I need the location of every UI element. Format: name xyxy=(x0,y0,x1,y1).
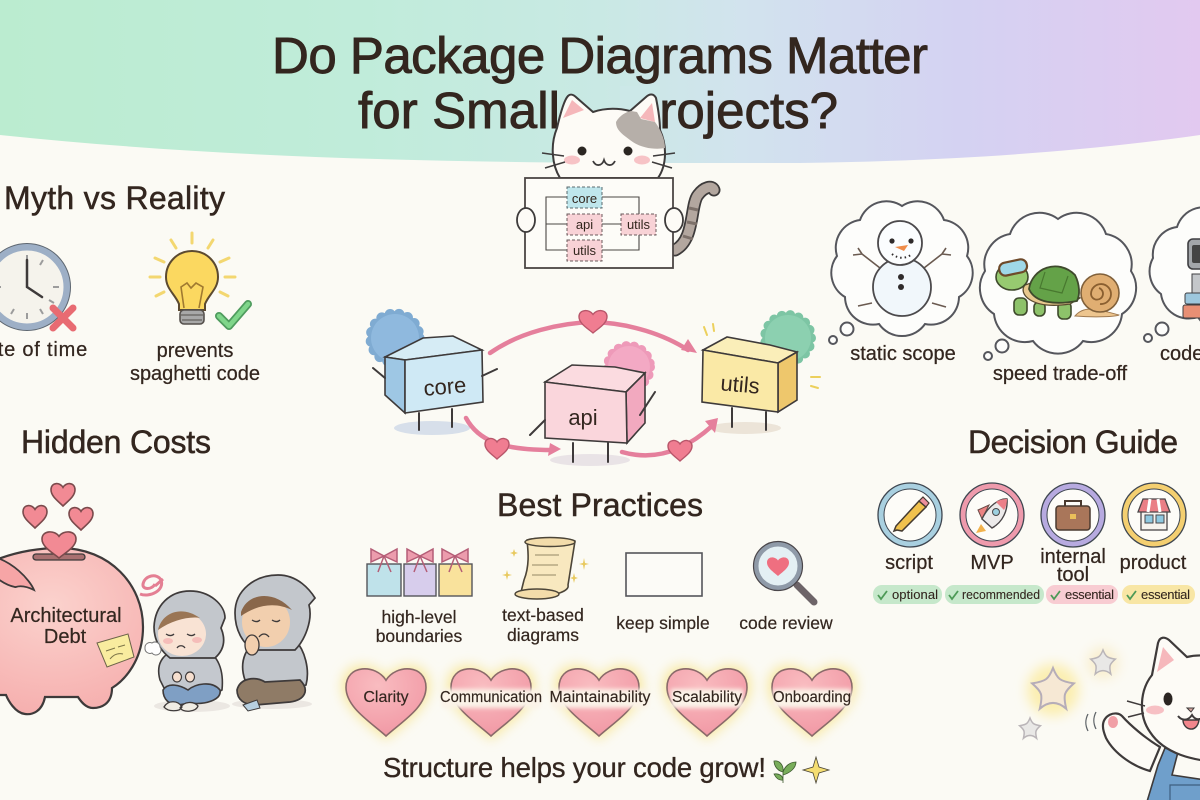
heart: communication: Communication xyxy=(440,689,542,706)
option: script xyxy=(878,483,942,574)
face xyxy=(1127,647,1200,729)
labels: boundaries xyxy=(376,626,463,646)
title xyxy=(272,27,928,139)
arm xyxy=(1103,713,1160,771)
title: for Small xyxy=(358,82,560,139)
arrow: api to utils xyxy=(622,418,718,461)
icon: sparkle xyxy=(803,757,829,783)
heading: myth vs reality: Myth vs Reality xyxy=(4,180,225,216)
reality label xyxy=(130,340,260,385)
icon: piggy bank xyxy=(0,532,163,714)
heart: clarity: Clarity xyxy=(363,689,409,706)
mascot: waving cat xyxy=(1020,638,1200,800)
pill: essential yellow: essential xyxy=(1141,587,1190,602)
pill: recommended: recommended xyxy=(962,587,1040,602)
panel: benefit hearts xyxy=(342,665,856,740)
heart glows xyxy=(342,665,856,740)
heading: best practices: Best Practices xyxy=(497,487,703,523)
heart: onboarding xyxy=(772,669,852,736)
icon: sprout xyxy=(774,761,796,783)
heading: decision guide: Decision Guide xyxy=(968,424,1178,460)
character: sad developer two xyxy=(232,575,315,711)
icon: rocket xyxy=(976,499,1007,533)
panel: decision guide xyxy=(873,424,1195,604)
pill: recommended xyxy=(945,585,1044,604)
heading: hidden costs: Hidden Costs xyxy=(21,424,211,460)
icon: gift boxes xyxy=(367,549,472,596)
icon: scroll xyxy=(502,538,589,599)
heart: scalability: Scalability xyxy=(672,689,742,706)
heart: onboarding: Onboarding xyxy=(773,689,851,706)
heart: clarity xyxy=(346,669,426,736)
arrow: core to api xyxy=(466,418,561,459)
option: product xyxy=(1120,483,1187,574)
labels: high-level xyxy=(382,607,456,627)
icon: blank rectangle xyxy=(626,553,702,596)
icon: piggy bank: Architectural xyxy=(10,605,122,627)
cat tail xyxy=(675,187,714,250)
reality label: spaghetti code xyxy=(130,363,260,385)
icon: briefcase xyxy=(1056,501,1090,530)
panel: thought bubbles xyxy=(829,201,1200,385)
panel: best practices xyxy=(367,487,833,646)
cat head xyxy=(542,94,675,178)
cat paws xyxy=(517,208,683,232)
package: api xyxy=(530,346,655,466)
icon: green check fill xyxy=(219,304,248,326)
icon: clock xyxy=(0,244,70,330)
labels: text-based xyxy=(502,605,584,625)
option: internal tool: internal xyxy=(1040,546,1106,568)
panel: hidden costs xyxy=(0,424,315,714)
labels: diagrams xyxy=(507,625,579,645)
heart: scalability xyxy=(667,669,747,736)
package: utils xyxy=(702,315,820,434)
overalls details xyxy=(1170,785,1200,800)
stars xyxy=(1020,647,1119,738)
title: Do Package Diagrams Matter xyxy=(272,27,928,84)
diagram board: core xyxy=(572,191,597,206)
icon: green check xyxy=(219,304,248,326)
body and overalls xyxy=(1146,748,1200,800)
icon: lightbulb xyxy=(150,233,235,324)
label: speed trade-off xyxy=(993,363,1128,385)
diagram board: utils xyxy=(573,243,597,258)
falling hearts xyxy=(23,484,93,530)
sticky note xyxy=(97,634,134,667)
labels xyxy=(376,605,833,646)
bubble: code xyxy=(1144,207,1200,365)
diagram board: utils xyxy=(627,217,651,232)
character: sad developer one xyxy=(145,591,230,712)
option: product: product xyxy=(1120,552,1187,574)
icon: pencil xyxy=(894,497,929,531)
head xyxy=(1142,638,1200,762)
option: internal tool: tool xyxy=(1057,564,1089,586)
icon: snail xyxy=(1075,274,1119,317)
icon: piggy bank: Debt xyxy=(44,626,87,648)
package: utils: utils xyxy=(720,370,761,399)
bubble: speed trade-off xyxy=(980,213,1136,385)
option: internal tool xyxy=(1040,483,1106,586)
label: static scope xyxy=(850,343,956,365)
icon: robot and books xyxy=(1183,239,1200,318)
heart: maintainability xyxy=(550,669,651,736)
option: script: script xyxy=(885,552,933,574)
pill: essential pink xyxy=(1046,585,1118,604)
option: MVP xyxy=(960,483,1024,574)
bubble: static scope xyxy=(829,201,973,365)
pill: optional xyxy=(873,585,942,604)
panel: package characters xyxy=(371,311,820,466)
pill: essential pink: essential xyxy=(1065,587,1114,602)
panel: myth vs reality xyxy=(0,180,260,385)
pill: optional: optional xyxy=(892,587,938,602)
title: Projects? xyxy=(625,82,838,139)
title mask behind cat xyxy=(620,86,660,116)
pill: essential yellow xyxy=(1122,585,1195,604)
labels: code review xyxy=(739,613,833,633)
diagram board xyxy=(525,178,673,268)
labels: keep simple xyxy=(616,613,710,633)
reality label: prevents xyxy=(157,340,233,362)
diagram board: api xyxy=(576,217,593,232)
closing message: Structure helps your code grow! xyxy=(383,752,766,783)
header banner xyxy=(0,0,1200,163)
arrow: core to utils xyxy=(490,311,697,353)
wave marks xyxy=(1086,712,1096,731)
package: core: core xyxy=(422,372,467,401)
icon: red x xyxy=(53,308,73,328)
heart: communication xyxy=(440,669,542,736)
icon: snowman xyxy=(853,221,951,316)
icon: shop xyxy=(1138,499,1170,530)
package: core xyxy=(371,314,497,435)
icon: magnifier xyxy=(754,542,814,602)
mascot: cat holding package diagram xyxy=(517,94,714,268)
paw pad xyxy=(1108,716,1118,728)
icon: turtle xyxy=(996,258,1080,319)
option: MVP: MVP xyxy=(970,552,1014,574)
heart: maintainability: Maintainability xyxy=(550,689,651,706)
package: api: api xyxy=(568,405,598,430)
